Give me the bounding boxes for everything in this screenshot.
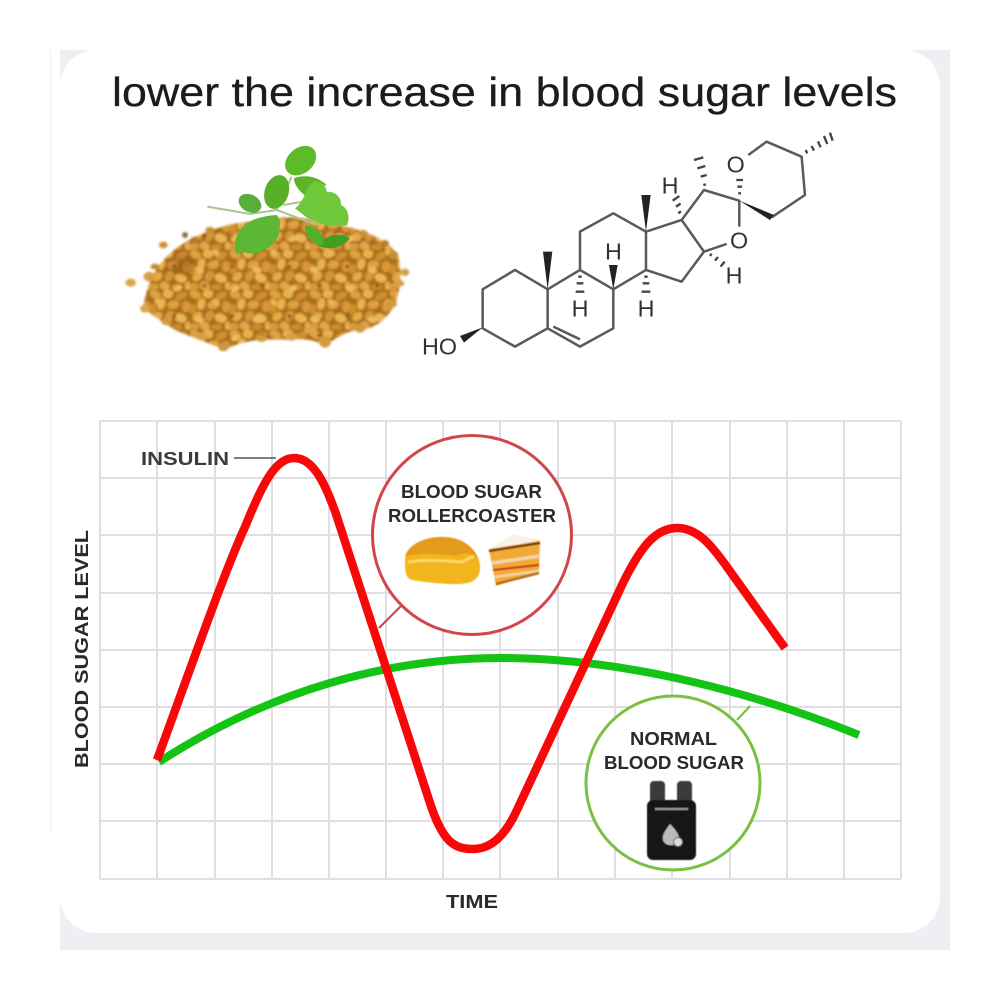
axis label: x: TIME — [446, 892, 498, 912]
icon: bun — [405, 537, 480, 584]
label: insulin: INSULIN — [141, 449, 229, 469]
atom labels: H — [662, 172, 679, 198]
axis label: y: BLOOD SUGAR LEVEL — [72, 530, 92, 768]
atom labels: H — [726, 262, 742, 288]
callout: normal blood sugar: BLOOD SUGAR — [604, 752, 744, 773]
bonds — [483, 142, 805, 347]
line: green normal curve — [159, 658, 859, 762]
atom labels: H — [638, 296, 655, 322]
seed pile — [125, 217, 409, 351]
title: lower the increase in blood sugar levels — [112, 69, 897, 115]
chart: blood sugar level over time — [72, 421, 901, 912]
stereo bonds — [460, 195, 774, 343]
leaves — [207, 140, 350, 261]
icon: cake slice — [489, 534, 540, 586]
icon: product bottle — [647, 781, 696, 860]
grid — [100, 421, 901, 879]
callout: normal blood sugar: NORMAL — [630, 728, 717, 749]
line: red insulin curve — [157, 458, 785, 849]
callout: normal blood sugar — [586, 696, 760, 870]
atom labels: O — [730, 227, 748, 253]
label: insulin — [141, 449, 276, 469]
pile shading — [169, 257, 194, 273]
callout: blood sugar rollercoaster — [372, 436, 572, 634]
atom labels — [422, 151, 748, 359]
atom labels: HO — [422, 333, 457, 359]
image: fenugreek seeds and leaves — [125, 140, 409, 351]
callout: blood sugar rollercoaster: BLOOD SUGAR — [401, 481, 542, 502]
atom labels: O — [727, 151, 745, 177]
atom labels: H — [605, 238, 622, 264]
callout: blood sugar rollercoaster: ROLLERCOASTER — [388, 505, 556, 526]
diagram: diosgenin molecular structure — [422, 133, 833, 359]
atom labels: H — [572, 296, 589, 322]
